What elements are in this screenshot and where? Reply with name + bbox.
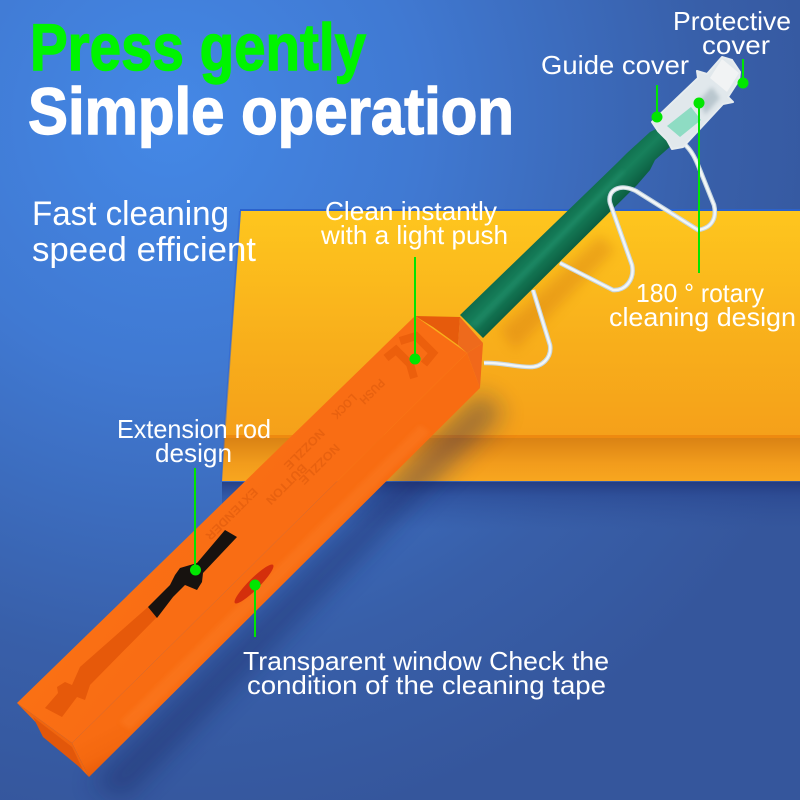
label: transparent window: Transparent window Check the	[243, 646, 609, 676]
callout marker: guide cover	[652, 85, 662, 122]
callout marker: extension rod	[190, 468, 201, 576]
callout marker: rotary design	[694, 98, 704, 273]
label: extension rod design: Extension rod	[117, 414, 271, 444]
label: extension rod design: design	[155, 438, 232, 468]
panel: yellow folder card	[220, 209, 800, 530]
label: protective cover	[673, 6, 791, 60]
callout marker: protective cover	[738, 59, 748, 88]
cleaning tape loops	[484, 143, 715, 367]
label: 180 degree rotary cleaning design: cleaning design	[609, 302, 796, 332]
protective and guide cover	[652, 57, 740, 149]
callout marker: clean instantly	[410, 257, 420, 364]
heading: Simple operation: Simple operation	[28, 74, 514, 148]
label: transparent window	[243, 646, 609, 700]
embossed lettering: NOZZLE	[296, 441, 343, 488]
pen shadow	[90, 235, 615, 800]
embossed lettering: BUTTON	[263, 461, 310, 508]
embossed lettering: NOZZLE	[281, 426, 328, 473]
label: clean instantly: with a light push	[320, 220, 508, 250]
label: transparent window: condition of the cleaning tape	[247, 670, 606, 700]
orange cleaner body	[17, 316, 483, 777]
callout marker: transparent window	[250, 580, 260, 637]
label: protective cover: Protective	[673, 6, 791, 36]
label: clean instantly: Clean instantly	[325, 196, 497, 226]
heading: Press gently: Press gently	[30, 10, 366, 84]
black slider window	[148, 530, 237, 618]
long slot in top face	[45, 607, 157, 717]
embossed lettering: LOCK	[328, 391, 360, 422]
embossed lettering	[203, 376, 388, 543]
arrow emblem	[386, 336, 433, 378]
label: guide cover: Guide cover	[541, 50, 689, 80]
collar	[415, 316, 483, 388]
label: protective cover: cover	[702, 30, 770, 60]
green tube	[460, 128, 672, 338]
top face	[17, 316, 467, 743]
embossed lettering: EXTENDER	[203, 485, 261, 543]
label: extension rod design	[117, 414, 271, 468]
label: clean instantly	[320, 196, 508, 250]
front opening	[17, 703, 89, 777]
lighter band on side face	[120, 425, 430, 730]
text: fast cleaning speed efficient	[32, 195, 257, 269]
text: fast cleaning speed efficient: speed efficient	[32, 231, 257, 269]
small transparent window	[231, 561, 277, 607]
side face	[72, 353, 480, 777]
embossed lettering: PUSH	[357, 376, 388, 407]
label: 180 degree rotary cleaning design: 180 ° rotary	[636, 278, 764, 308]
title	[28, 10, 514, 148]
text: fast cleaning speed efficient: Fast cleaning	[32, 195, 229, 233]
label: 180 degree rotary cleaning design	[609, 278, 796, 332]
